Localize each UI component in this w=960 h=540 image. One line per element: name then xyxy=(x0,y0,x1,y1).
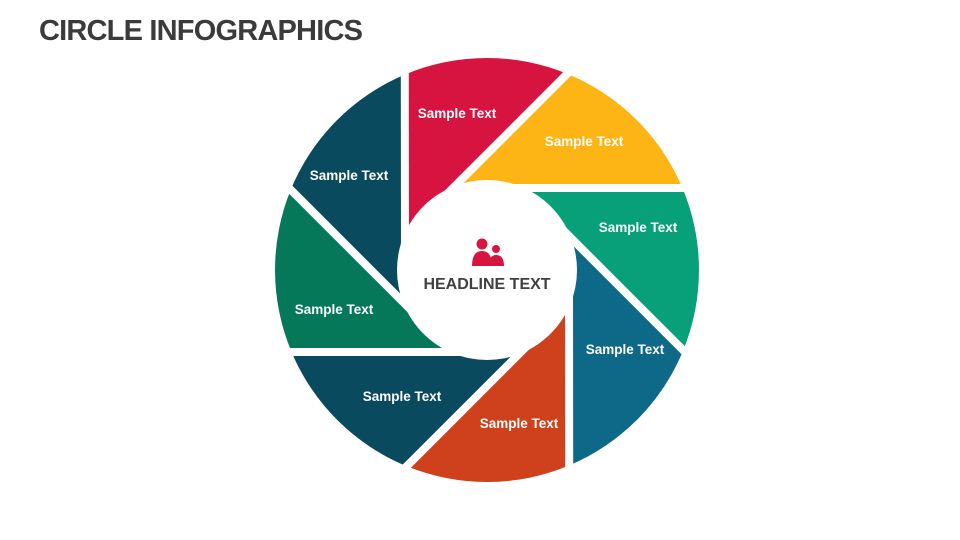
blade labels: Sample Text xyxy=(418,106,497,121)
blade: teal right xyxy=(487,212,683,465)
blade labels: Sample Text xyxy=(295,302,374,317)
blade: dark teal top-left xyxy=(291,75,487,328)
blade: yellow xyxy=(429,74,682,270)
blade: green left xyxy=(275,190,487,352)
blade labels: Sample Text xyxy=(363,389,442,404)
blade labels: Sample Text xyxy=(545,134,624,149)
blade labels xyxy=(295,106,678,431)
icon: people xyxy=(472,238,504,266)
blade: orange xyxy=(407,270,569,482)
blade: dark teal bottom xyxy=(292,270,545,466)
title: CIRCLE INFOGRAPHICS xyxy=(39,15,362,47)
headline text: HEADLINE TEXT xyxy=(423,276,551,293)
blade labels: Sample Text xyxy=(310,168,389,183)
blade labels: Sample Text xyxy=(599,220,678,235)
blade labels: Sample Text xyxy=(586,342,665,357)
blade labels: Sample Text xyxy=(480,416,559,431)
blade: green right xyxy=(487,188,699,350)
center hole xyxy=(397,180,577,360)
blade: red xyxy=(405,58,567,270)
